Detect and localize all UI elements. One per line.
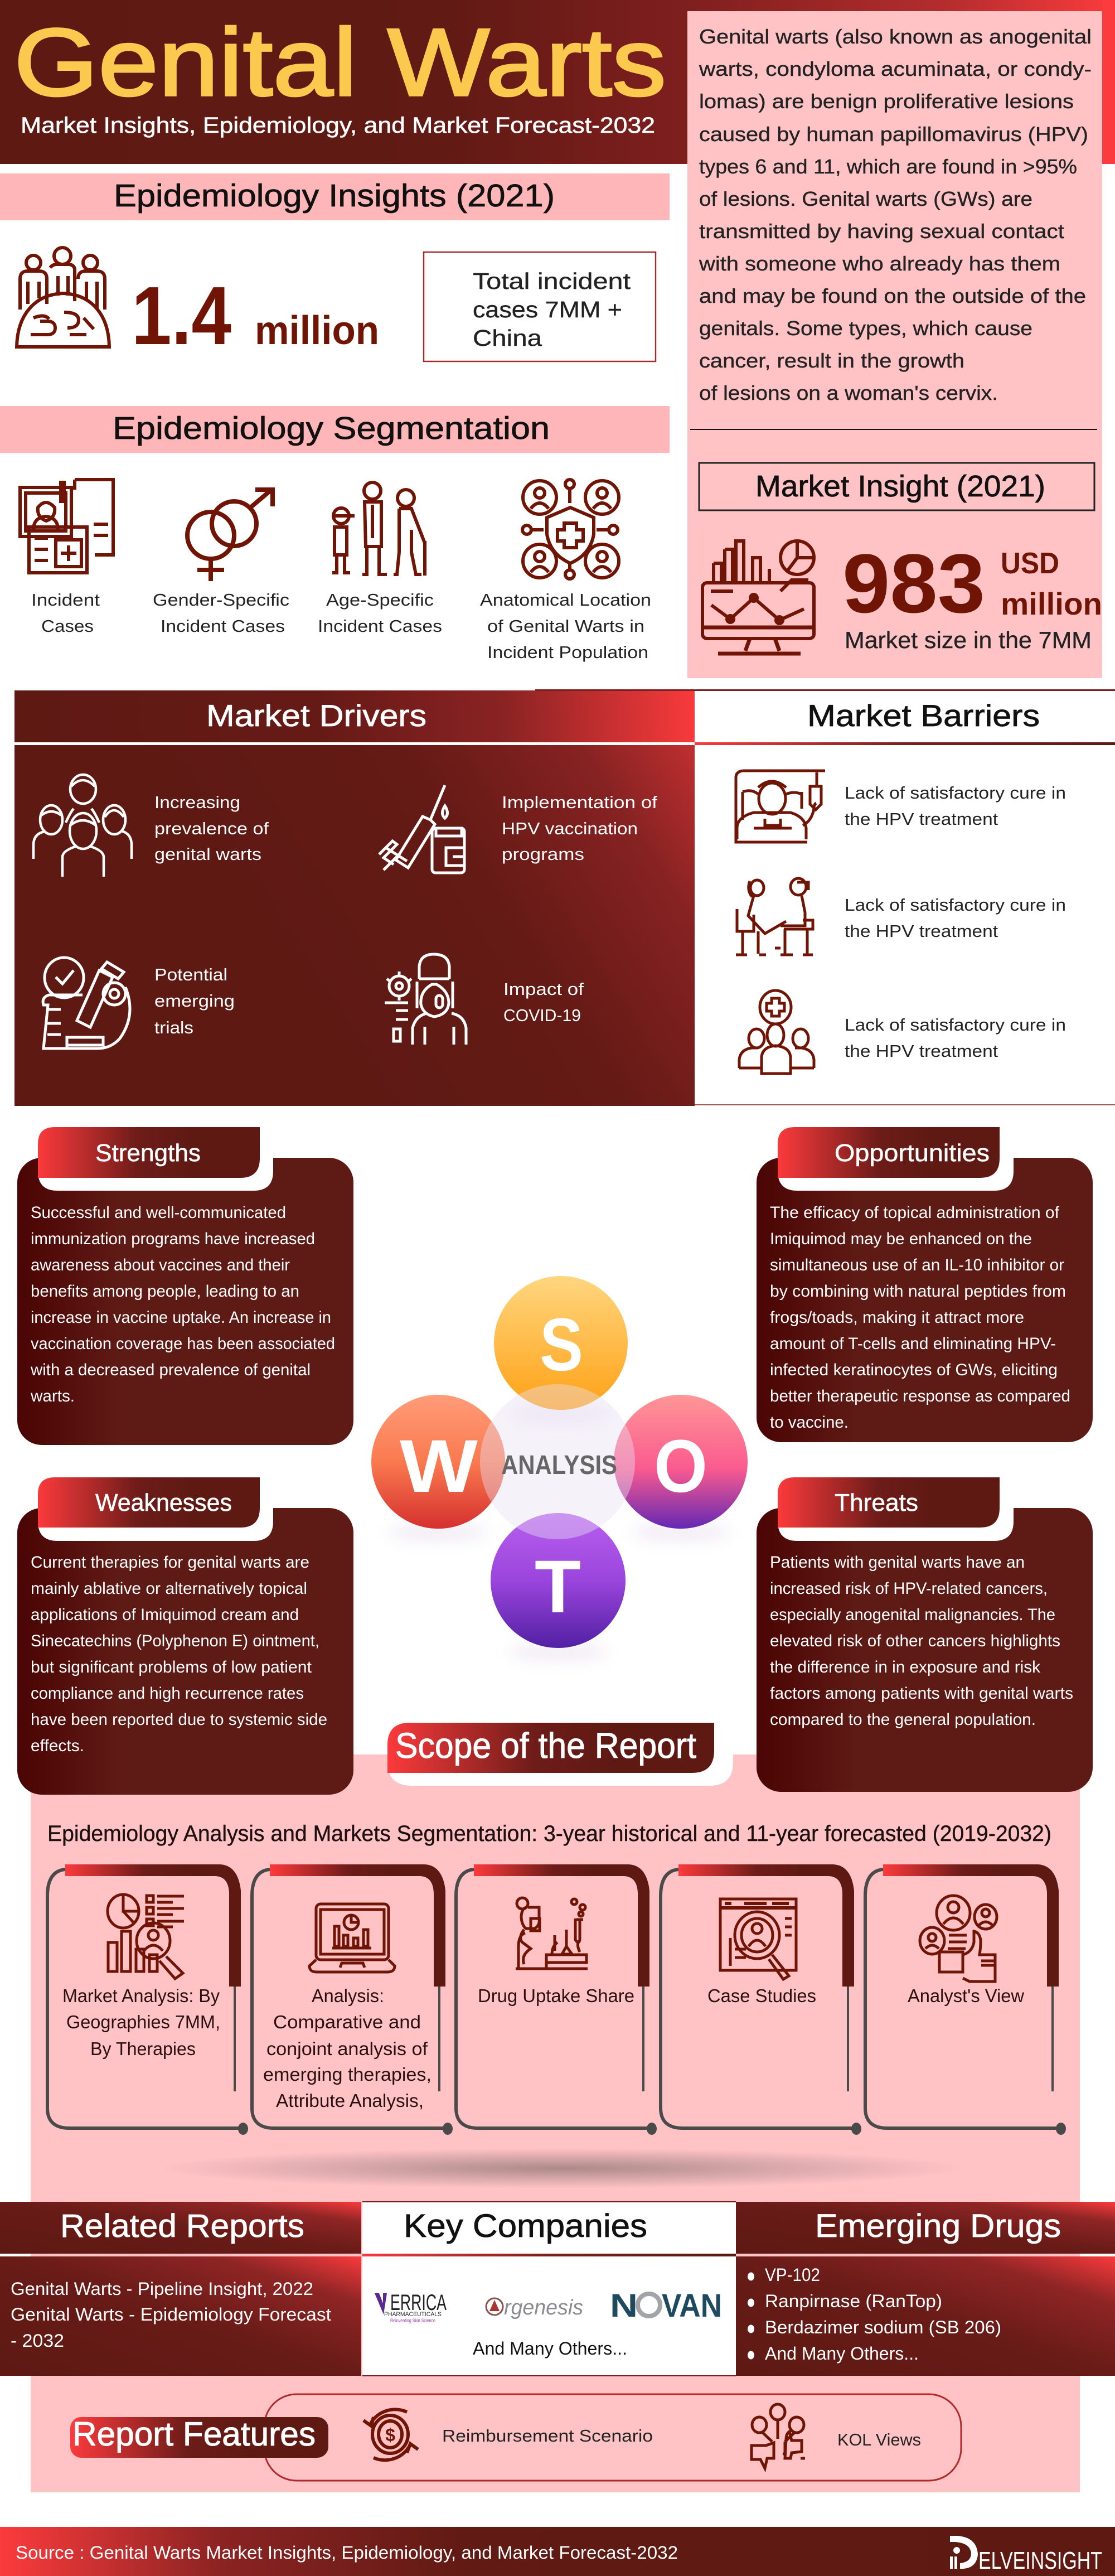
text: barrier three: the HPV treatment — [845, 1041, 998, 1061]
text: strengths body: benefits among people, leading to an — [31, 1282, 299, 1301]
heading: weaknesses: Weaknesses — [95, 1489, 232, 1516]
panel: key companies — [362, 2202, 736, 2376]
definition text: with someone who already has them — [699, 252, 1060, 275]
logo: verrica: Reinventing Skin Science — [390, 2318, 435, 2323]
text: potential emerging trials: emerging — [154, 991, 235, 1011]
text: weaknesses body: applications of Imiquimod cream and — [31, 1606, 299, 1624]
label: anatomical location — [480, 590, 651, 662]
text: and many others: And Many Others... — [473, 2338, 627, 2358]
panel: weaknesses — [17, 1477, 353, 1795]
label: incident cases — [31, 590, 100, 636]
text: weaknesses body: but significant problems of low patient — [31, 1658, 312, 1676]
text: threats body: compared to the general population. — [770, 1710, 1036, 1729]
text: opportunities body: to vaccine. — [770, 1413, 849, 1432]
text: opportunities body: frogs/toads, making it attract more — [770, 1308, 1024, 1327]
text: weaknesses body: Sinecatechins (Polyphenon E) ointment, — [31, 1632, 319, 1650]
definition text: warts, condyloma acuminata, or condy- — [699, 57, 1092, 80]
icon: person with mask and virus — [385, 954, 466, 1045]
icon: gender symbols — [187, 490, 273, 581]
statistic: 1.4 million: 1.4 — [132, 270, 231, 362]
label: anatomical location: of Genital Warts in — [487, 616, 644, 636]
definition text: lomas) are benign proliferative lesions — [699, 90, 1074, 113]
text: potential emerging trials — [154, 965, 235, 1037]
text: barrier two — [845, 895, 1066, 941]
icon: monitor with charts — [702, 541, 814, 654]
large pink background: scope of the report — [31, 1755, 1080, 2492]
text: barrier one: Lack of satisfactory cure in — [845, 783, 1066, 803]
logo: verrica — [375, 2290, 447, 2323]
definition text — [699, 25, 1092, 404]
icon: analyst thumbs up — [920, 1896, 997, 1981]
text: barrier two: Lack of satisfactory cure in — [845, 895, 1066, 915]
icon: people on globe — [17, 248, 109, 347]
icon: laptop with charts — [309, 1904, 395, 1972]
heading: market barriers: Market Barriers — [807, 698, 1040, 733]
label: analysis: Attribute Analysis, — [276, 2090, 424, 2111]
icon: incident cases documents — [20, 480, 113, 573]
statistic: 1.4 million: million — [255, 308, 379, 353]
text: threats body: increased risk of HPV-related cancers, — [770, 1579, 1048, 1598]
logo: verrica: ERRICA — [390, 2290, 447, 2315]
heading: key companies: Key Companies — [404, 2208, 647, 2244]
text: strengths body: increase in vaccine uptake. An increase in — [31, 1308, 331, 1327]
text: related reports list: - 2032 — [11, 2331, 64, 2351]
text: increasing prevalence — [154, 792, 269, 864]
heading: market drivers: Market Drivers — [206, 698, 426, 733]
circle: analysis centre: ANALYSIS — [501, 1451, 617, 1480]
text: opportunities body: amount of T-cells and eliminating HPV- — [770, 1335, 1056, 1353]
text: impact of covid-19 — [503, 979, 584, 1025]
list: emerging drugs: And Many Others... — [765, 2343, 919, 2364]
circle: T — [491, 1513, 626, 1648]
heading: epidemiology insights — [0, 173, 670, 220]
list: emerging drugs: Berdazimer sodium (SB 206) — [765, 2317, 1001, 2337]
text: strengths body: awareness about vaccines and their — [31, 1256, 290, 1274]
heading: market insight — [699, 463, 1094, 510]
logo: delveinsight — [950, 2536, 1102, 2574]
text: hpv vaccination: Implementation of — [502, 792, 657, 812]
list: emerging drugs: Ranpirnase (RanTop) — [765, 2291, 942, 2311]
statistic: 1.4 million — [132, 270, 379, 362]
text: hpv vaccination — [502, 792, 657, 864]
text: strengths body: immunization programs have increased — [31, 1230, 315, 1248]
icon: reimbursement dollar — [363, 2409, 418, 2460]
text: impact of covid-19: Impact of — [503, 979, 584, 999]
text: threats body: especially anogenital malignancies. The — [770, 1606, 1055, 1624]
panel: market barriers — [535, 690, 1115, 1105]
text: weaknesses body: have been reported due to systemic side — [31, 1710, 327, 1729]
label: incident cases: Cases — [41, 616, 94, 636]
icon: age groups — [332, 482, 425, 576]
text: weaknesses body: mainly ablative or alternatively topical — [31, 1579, 307, 1598]
market size figure: 983 — [842, 537, 985, 630]
definition text: and may be found on the outside of the — [699, 284, 1086, 307]
card: market analysis — [47, 1864, 248, 2135]
text: source: Source : Genital Warts Market Insights, Epidemiology, and Market Forecast-2032 — [16, 2543, 678, 2563]
text: opportunities body — [770, 1204, 1070, 1432]
text: barrier one: the HPV treatment — [845, 809, 998, 829]
label: age-specific incident cases: Age-Specific — [326, 590, 434, 610]
logo: orgenesis: rgenesis — [504, 2296, 583, 2319]
panel: definition and market insight — [687, 11, 1102, 678]
heading: emerging drugs: Emerging Drugs — [815, 2208, 1061, 2244]
panel: related reports — [0, 2202, 361, 2376]
label: analysis: Comparative and — [273, 2012, 421, 2032]
circle: analysis centre — [480, 1384, 635, 1539]
icon: group with medical cross — [739, 990, 814, 1074]
icon: web page with magnifier — [720, 1899, 796, 1979]
logo: novan — [610, 2288, 722, 2324]
logo: novan: N — [610, 2288, 638, 2324]
text: strengths body: Successful and well-communicated — [31, 1204, 286, 1222]
text: increasing prevalence: Increasing — [154, 792, 240, 812]
circle: T: T — [535, 1545, 581, 1628]
definition text: Genital warts (also known as anogenital — [699, 25, 1092, 48]
text: reimbursement scenario: Reimbursement Scenario — [442, 2426, 653, 2445]
circle: W — [371, 1395, 505, 1529]
text: opportunities body: The efficacy of topical administration of — [770, 1204, 1060, 1222]
logo: novan: VAN — [662, 2288, 722, 2324]
market size figure — [842, 537, 1102, 630]
market size figure: USD — [1001, 547, 1059, 580]
panel: strengths — [17, 1127, 353, 1445]
text: weaknesses body: effects. — [31, 1737, 84, 1755]
text: barrier two: the HPV treatment — [845, 921, 998, 941]
label: anatomical location: Incident Population — [487, 642, 648, 662]
text: strengths body — [30, 1204, 335, 1405]
text: barrier one — [845, 783, 1066, 829]
icon: reimbursement dollar: $ — [385, 2425, 395, 2445]
label: market analysis — [62, 1985, 220, 2059]
subtitle: Market Insights, Epidemiology, and Market Forecast-2032 — [21, 113, 655, 138]
icon: anatomical location shield — [522, 480, 619, 579]
title banner — [0, 0, 1115, 164]
text: impact of covid-19: COVID-19 — [503, 1006, 581, 1025]
definition text: types 6 and 11, which are found in >95% — [699, 155, 1077, 178]
text: hpv vaccination: HPV vaccination — [502, 819, 638, 838]
panel: threats — [757, 1477, 1093, 1792]
text: opportunities body: infected keratinocytes of GWs, eliciting — [770, 1361, 1058, 1379]
card: drug uptake share — [456, 1864, 657, 2135]
callout: total incident cases: cases 7MM + — [473, 297, 622, 322]
card: case studies — [661, 1864, 861, 2135]
text: threats body: the difference in in exposure and risk — [770, 1658, 1041, 1676]
text: opportunities body: simultaneous use of an IL-10 inhibitor or — [770, 1256, 1064, 1274]
heading: epidemiology segmentation: Epidemiology Segmentation — [113, 410, 550, 446]
text: strengths body: warts. — [30, 1387, 75, 1405]
text: barrier three: Lack of satisfactory cure in — [845, 1015, 1066, 1035]
heading: strengths: Strengths — [95, 1139, 201, 1167]
text: increasing prevalence: genital warts — [154, 844, 261, 864]
label: anatomical location: Anatomical Location — [480, 590, 651, 610]
text: threats body: Patients with genital warts have an — [770, 1553, 1025, 1572]
circle: S — [494, 1276, 628, 1410]
definition text: genitals. Some types, which cause — [699, 317, 1032, 340]
text: threats body: elevated risk of other cancers highlights — [770, 1632, 1060, 1650]
text: weaknesses body: compliance and high recurrence rates — [31, 1684, 304, 1703]
label: market analysis: Market Analysis: By — [62, 1985, 220, 2006]
icon: kol thumbs and speech — [752, 2404, 805, 2468]
text: strengths body: with a decreased prevalence of genital — [30, 1361, 311, 1379]
panel: market drivers — [14, 690, 695, 1106]
circle: W: W — [400, 1425, 478, 1508]
footer — [0, 2527, 1115, 2576]
label: incident cases: Incident — [31, 590, 100, 610]
text: potential emerging trials: trials — [154, 1018, 193, 1037]
callout: total incident cases: China — [473, 325, 542, 351]
text: weaknesses body — [31, 1553, 327, 1755]
text: kol views: KOL Views — [837, 2430, 921, 2449]
text: opportunities body: better therapeutic response as compared — [770, 1387, 1070, 1405]
label: case studies: Case Studies — [707, 1985, 816, 2006]
list: emerging drugs — [748, 2265, 1001, 2364]
icon: syringe and vial — [379, 785, 464, 873]
text: potential emerging trials: Potential — [154, 965, 227, 984]
circle: O — [614, 1395, 748, 1529]
market size label: Market size in the 7MM — [845, 627, 1092, 653]
icon: patient and doctor seated — [736, 878, 813, 955]
text: epidemiology analysis subtitle: Epidemiology Analysis and Markets Segmentation: 3-year historical and 11-year forecasted (2019-2032) — [47, 1821, 1051, 1846]
logo: verrica: PHARMACEUTICALS — [384, 2311, 442, 2318]
label: analysis: conjoint analysis of — [266, 2038, 428, 2059]
list: emerging drugs: VP-102 — [765, 2265, 820, 2285]
definition text: transmitted by having sexual contact — [699, 220, 1064, 243]
title: Genital Warts — [14, 9, 666, 116]
definition text: of lesions on a woman's cervix. — [699, 381, 998, 404]
panel: report features — [70, 2394, 961, 2481]
circle: S: S — [540, 1303, 583, 1386]
heading: related reports: Related Reports — [60, 2208, 304, 2244]
label: gender-specific incident cases: Incident Cases — [161, 616, 285, 636]
label: age-specific incident cases — [318, 590, 442, 636]
card: analysis — [252, 1864, 453, 2135]
label: market analysis: Geographies 7MM, — [66, 2012, 220, 2032]
heading: opportunities: Opportunities — [835, 1139, 990, 1167]
card: analyst's view — [865, 1864, 1066, 2135]
icon: scientist with test tubes — [516, 1898, 588, 1969]
callout: total incident cases — [424, 252, 656, 361]
icon: microscope with check — [43, 958, 130, 1048]
label: analyst's view: Analyst's View — [908, 1985, 1024, 2006]
heading: scope of the report — [387, 1723, 733, 1786]
market size figure: million — [1001, 586, 1102, 621]
text: threats body — [770, 1553, 1073, 1729]
heading: report features: Report Features — [72, 2415, 316, 2453]
label: gender-specific incident cases — [153, 590, 289, 636]
heading: threats: Threats — [835, 1489, 918, 1516]
panel: opportunities — [757, 1127, 1093, 1442]
label: gender-specific incident cases: Gender-Specific — [153, 590, 289, 610]
label: analysis — [263, 1985, 432, 2111]
label: drug uptake share: Drug Uptake Share — [478, 1985, 634, 2006]
text: strengths body: vaccination coverage has been associated — [31, 1335, 335, 1353]
circle: O: O — [654, 1425, 707, 1508]
text: threats body: factors among patients with genital warts — [770, 1684, 1073, 1703]
label: analysis: Analysis: — [312, 1985, 384, 2006]
definition text: caused by human papillomavirus (HPV) — [699, 123, 1088, 146]
definition text: cancer, result in the growth — [699, 349, 964, 372]
panel: emerging drugs — [736, 2202, 1115, 2376]
label: age-specific incident cases: Incident Cases — [318, 616, 442, 636]
heading: scope of the report: Scope of the Report — [395, 1726, 696, 1766]
text: related reports list — [11, 2279, 331, 2351]
label: market analysis: By Therapies — [90, 2038, 196, 2059]
icon: patient in bed with iv — [736, 771, 825, 842]
label: analysis: emerging therapies, — [263, 2064, 432, 2085]
callout: total incident cases: Total incident — [473, 268, 631, 294]
heading: epidemiology insights: Epidemiology Insights (2021) — [114, 178, 555, 214]
text: increasing prevalence: prevalence of — [154, 819, 269, 838]
heading: epidemiology segmentation — [0, 406, 670, 453]
definition text: of lesions. Genital warts (GWs) are — [699, 187, 1032, 210]
text: hpv vaccination: programs — [502, 844, 584, 864]
text: opportunities body: Imiquimod may be enhanced on the — [770, 1230, 1032, 1248]
text: related reports list: Genital Warts - Epidemiology Forecast — [11, 2304, 331, 2324]
text: related reports list: Genital Warts - Pipeline Insight, 2022 — [11, 2279, 313, 2299]
icon: group of people — [33, 775, 132, 877]
text: weaknesses body: Current therapies for genital warts are — [31, 1553, 309, 1572]
text: opportunities body: by combining with natural peptides from — [770, 1282, 1066, 1301]
text: barrier three — [845, 1015, 1066, 1061]
icon: pie chart and magnifier — [108, 1894, 184, 1979]
heading: market insight: Market Insight (2021) — [755, 470, 1045, 503]
diagram: swot analysis circles — [371, 1276, 748, 1661]
